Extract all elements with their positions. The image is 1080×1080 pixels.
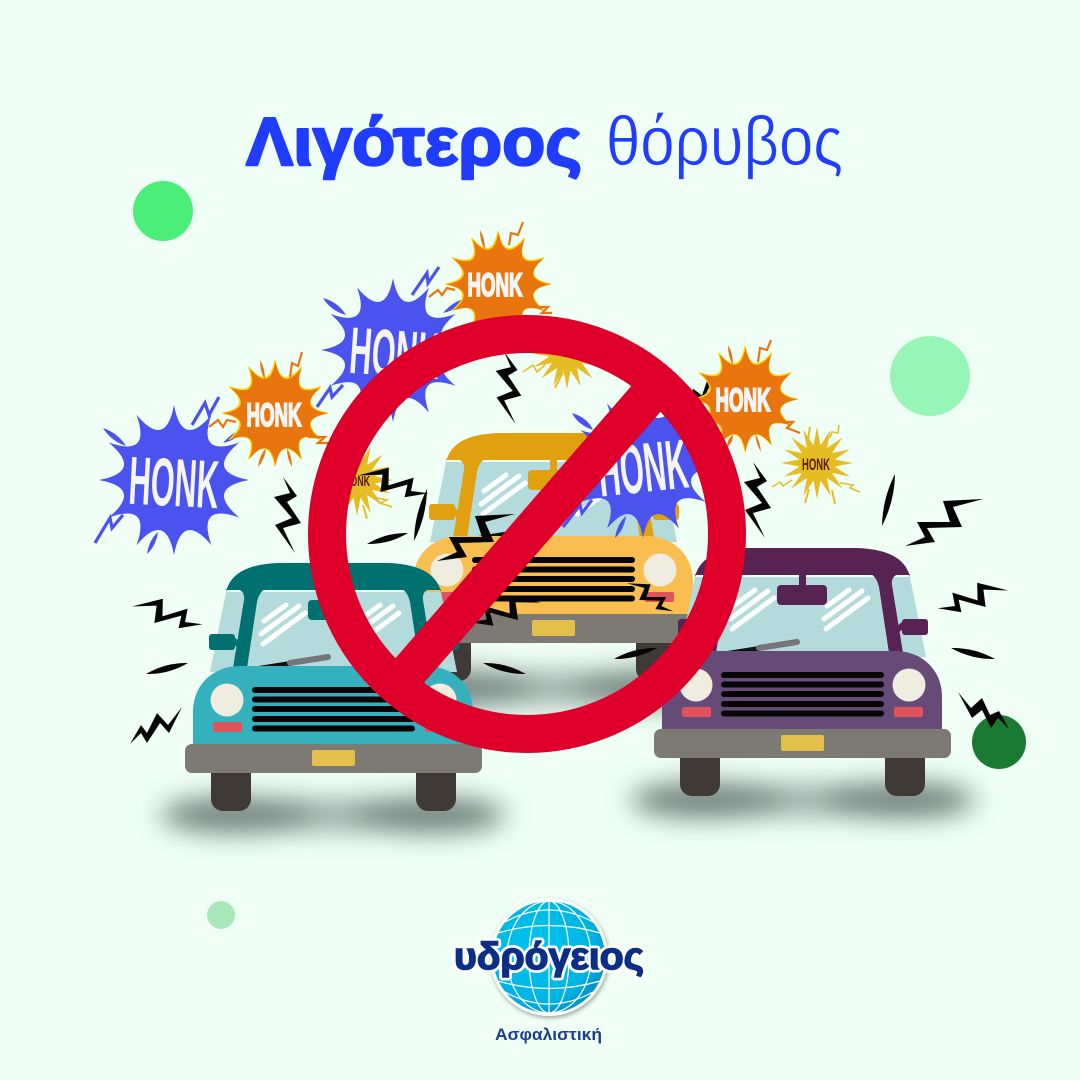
honk burst: blue right: HONK	[594, 425, 692, 512]
car: teal (left)	[185, 563, 482, 811]
honk burst: yellow left	[321, 444, 393, 519]
honk burst: orange top	[429, 222, 552, 337]
honk burst: orange left	[209, 352, 328, 467]
black bolt behind orange burst	[678, 374, 726, 411]
black noise ticks	[146, 474, 995, 674]
honk burst: yellow left: HONK	[344, 473, 370, 490]
decorative dark green circle right	[972, 715, 1026, 769]
decorative mint circle right	[890, 336, 970, 416]
car: yellow (back)	[405, 433, 702, 681]
honk burst: blue centre	[317, 267, 467, 422]
honk burst: orange top: HONK	[468, 267, 522, 303]
honk burst: yellow right: HONK	[802, 455, 830, 474]
honk burst: blue left: HONK	[127, 443, 221, 523]
honk burst: yellow top	[523, 317, 603, 389]
car shadows	[158, 670, 978, 833]
honk burst: orange right: HONK	[716, 382, 770, 418]
honk burst: yellow right	[772, 425, 860, 504]
title: θόρυβος	[606, 102, 843, 180]
prohibition sign	[327, 334, 727, 734]
honk burst: orange right	[692, 340, 800, 452]
black noise bolts	[130, 352, 1009, 744]
honk burst: orange left: HONK	[246, 397, 302, 433]
decorative pale green circle bottom left	[207, 901, 235, 929]
logo: Hydrogeios globe: υδρόγειος	[454, 936, 644, 978]
logo: Hydrogeios globe: υδρόγειος	[454, 936, 644, 978]
logo: Hydrogeios globe	[454, 898, 644, 1016]
honk burst: blue right	[563, 394, 715, 538]
logo caption: Ασφαλιστική	[495, 1026, 602, 1044]
decorative green circle top left	[133, 181, 193, 241]
title	[246, 102, 843, 180]
honk burst: blue left	[95, 397, 249, 555]
title: Λιγότερος	[246, 104, 582, 180]
honk burst: blue centre: HONK	[347, 313, 442, 393]
car: purple (right)	[654, 548, 951, 796]
